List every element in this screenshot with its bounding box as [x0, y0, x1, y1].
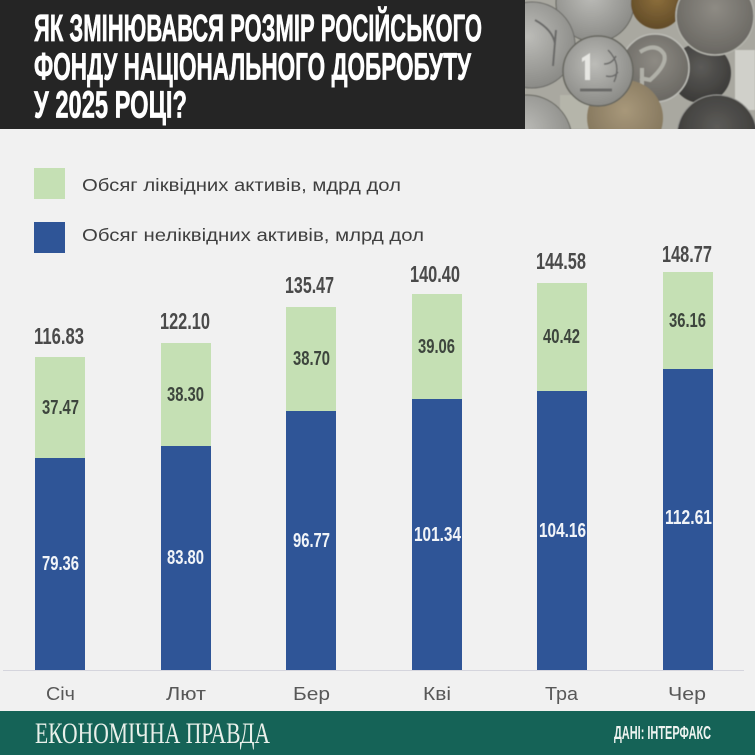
bar: Лют: [160, 308, 211, 704]
bar: Лют: Лют: [166, 684, 206, 704]
bar: Тра: 40.42: [543, 326, 580, 348]
bar: Чер: [662, 241, 713, 704]
bar: Бер: 38.70: [293, 348, 330, 370]
bar: Кві: [410, 261, 462, 704]
legend: illiquid assets: [34, 222, 424, 253]
bar: Кві: Кві: [423, 684, 451, 704]
bar: Бер: [285, 272, 336, 704]
bar: Тра: [536, 248, 587, 704]
bar: Тра: 104.16: [539, 520, 586, 542]
bar: Лют: 122.10: [160, 308, 210, 334]
bar: Лют: 38.30: [167, 384, 204, 406]
bar: Чер: Чер: [668, 684, 706, 704]
title: ФОНДУ НАЦІОНАЛЬНОГО ДОБРОБУТУ: [34, 46, 471, 88]
bar: Тра: Тра: [545, 684, 579, 704]
bar: Січ: 79.36: [42, 553, 79, 575]
bar: Січ: [34, 323, 85, 704]
legend: liquid assets: [34, 168, 401, 199]
bar: Січ: 116.83: [34, 323, 84, 349]
footer logo: ЕКОНОМІЧНА ПРАВДА: [35, 717, 270, 750]
legend: liquid assets: Обсяг ліквідних активів, мдрд дол: [82, 175, 401, 195]
title: [34, 5, 482, 126]
legend: illiquid assets: Обсяг неліквідних активів, млрд дол: [82, 225, 424, 245]
photo: ruble coins: [525, 0, 755, 129]
bar: Чер: 148.77: [662, 241, 712, 267]
stacked bar chart: [3, 241, 744, 704]
legend: [34, 168, 424, 253]
bar: Кві: 101.34: [414, 524, 462, 546]
bar: Кві: 39.06: [418, 336, 455, 358]
footer band: [0, 711, 755, 755]
bar: Бер: 135.47: [285, 272, 334, 298]
bar: Січ: 37.47: [42, 397, 79, 419]
axis line: [3, 670, 744, 671]
bar: Бер: Бер: [293, 684, 330, 704]
bar: Бер: 96.77: [293, 530, 330, 552]
bar: Чер: 112.61: [665, 507, 712, 529]
bar: Січ: Січ: [46, 684, 75, 704]
bar: Тра: 144.58: [536, 248, 586, 274]
bar: Кві: 140.40: [410, 261, 460, 287]
bar: Лют: 83.80: [167, 547, 204, 569]
title: У 2025 РОЦІ?: [34, 84, 187, 126]
bar: Чер: 36.16: [669, 310, 706, 332]
header band: [0, 0, 755, 129]
